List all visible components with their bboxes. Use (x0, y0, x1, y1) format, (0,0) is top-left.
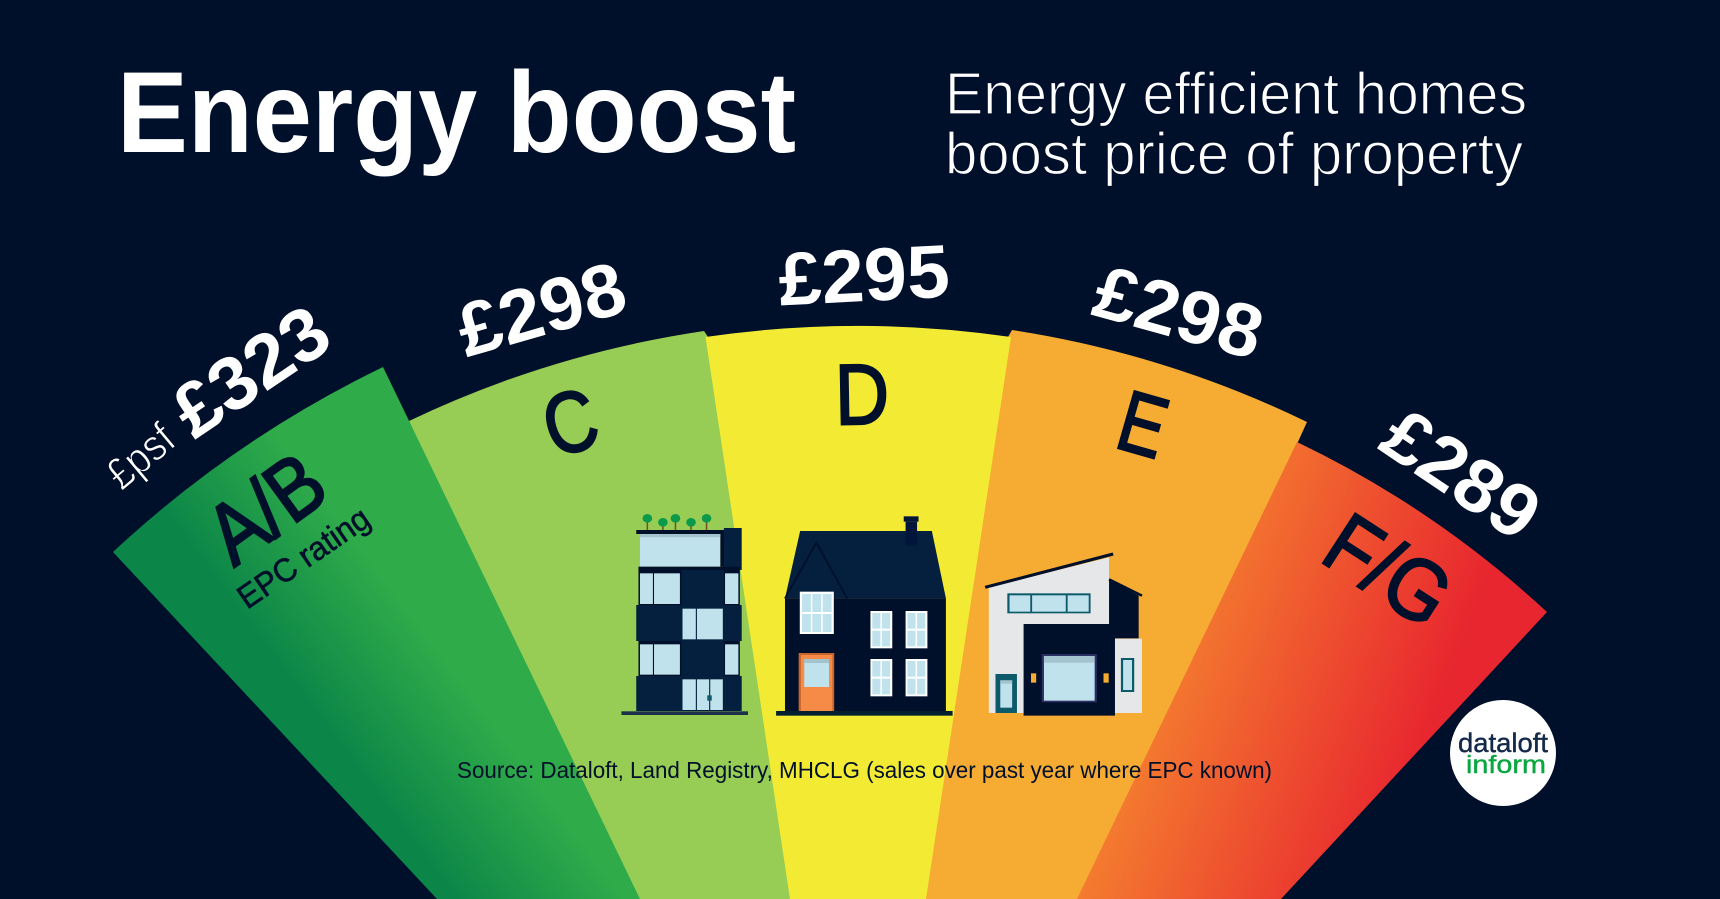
price: F/G £289: £289 (1367, 391, 1556, 556)
price: A/B £323: £323 (156, 288, 345, 453)
wedge: D (706, 326, 1011, 899)
price: E £298: £298 (1085, 249, 1272, 375)
icon: modern house (985, 554, 1142, 716)
rating: D: D (834, 347, 890, 443)
price: D £295: £295 (776, 229, 952, 321)
icon: apartment building (621, 514, 748, 715)
subtitle (945, 61, 1527, 187)
wedge: C (409, 331, 800, 899)
rating: E: E (1107, 372, 1178, 477)
icon: traditional house (776, 516, 953, 716)
logo: dataloft inform: inform (1466, 751, 1546, 779)
title: Energy boost (117, 49, 796, 177)
wedge: F/G (1077, 442, 1547, 899)
wedge: A/B (113, 367, 640, 899)
label: EPC rating: EPC rating (230, 499, 376, 616)
price: C £298: £298 (448, 245, 635, 373)
source note: Source: Dataloft, Land Registry, MHCLG (sales over past year where EPC known) (457, 757, 1272, 783)
logo: dataloft inform: dataloft (1458, 728, 1548, 758)
logo: dataloft inform (1450, 700, 1556, 806)
subtitle: Energy efficient homes (945, 61, 1527, 127)
subtitle: boost price of property (945, 121, 1523, 187)
wedge: E (916, 330, 1307, 899)
rating: C: C (532, 370, 609, 476)
unit label: £psf: £psf (97, 414, 185, 499)
EPC fan chart (113, 326, 1547, 899)
rating: A/B: A/B (189, 434, 344, 583)
rating: F/G: F/G (1307, 495, 1469, 646)
